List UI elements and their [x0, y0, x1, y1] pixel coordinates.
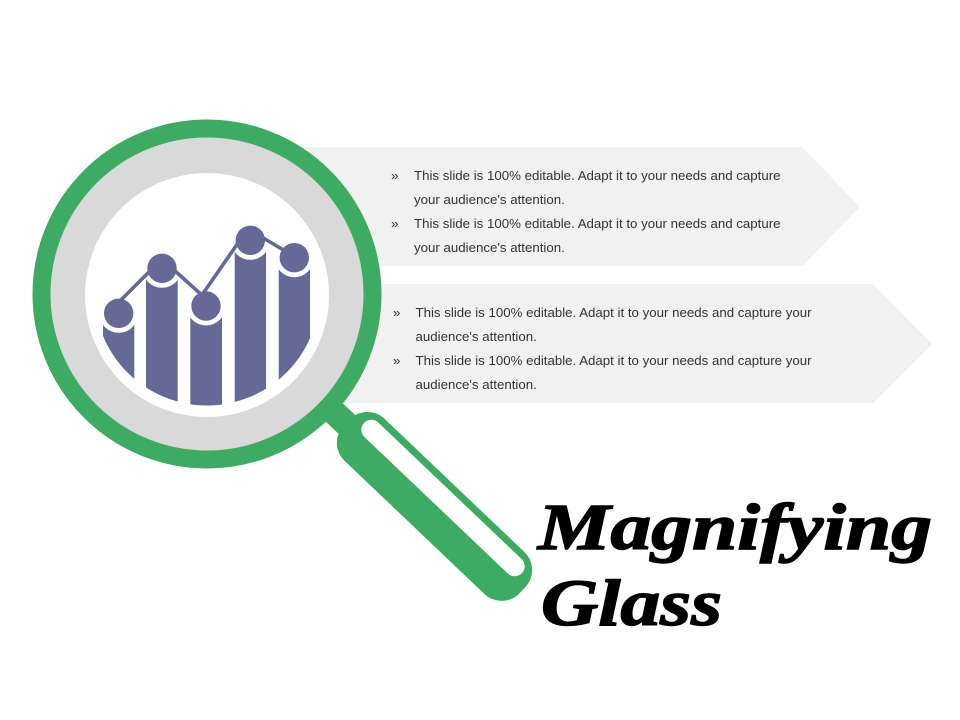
- trend line: [119, 236, 285, 302]
- bar top cut-outs: [99, 221, 314, 333]
- title: [537, 491, 932, 640]
- icon: magnifying glass: [42, 128, 542, 611]
- lower arrow text block: This slide is 100% editable. Adapt it to your needs and capture your: [416, 305, 812, 320]
- title: Glass: [541, 567, 722, 640]
- magnifier handle: [327, 402, 542, 611]
- upper arrow text block: This slide is 100% editable. Adapt it to your needs and capture: [414, 216, 781, 231]
- upper arrow text block: This slide is 100% editable. Adapt it to your needs and capture: [414, 168, 781, 183]
- lower arrow text block: audience's attention.: [416, 329, 537, 344]
- upper arrow text block: »: [391, 168, 398, 183]
- lower arrow text block: [393, 305, 812, 392]
- title: Magnifying: [537, 491, 932, 564]
- magnifier lens: [85, 173, 329, 417]
- lower arrow text block: »: [393, 305, 400, 320]
- chart: bars with line: [99, 221, 314, 410]
- magnifier neck: [308, 388, 357, 434]
- lower arrow text block: audience's attention.: [416, 377, 537, 392]
- magnifier green ring: [42, 128, 372, 460]
- upper arrow text block: your audience's attention.: [414, 192, 565, 207]
- upper arrow text block: your audience's attention.: [414, 240, 565, 255]
- panel: upper arrow: [290, 147, 860, 266]
- panel: lower arrow: [290, 284, 932, 403]
- upper arrow text block: »: [391, 216, 398, 231]
- chart bars: [103, 247, 310, 410]
- data points: [104, 226, 309, 328]
- lower arrow text block: »: [393, 353, 400, 368]
- lower arrow text block: This slide is 100% editable. Adapt it to your needs and capture your: [416, 353, 812, 368]
- infographic canvas: [32, 120, 932, 626]
- upper arrow text block: [391, 168, 781, 255]
